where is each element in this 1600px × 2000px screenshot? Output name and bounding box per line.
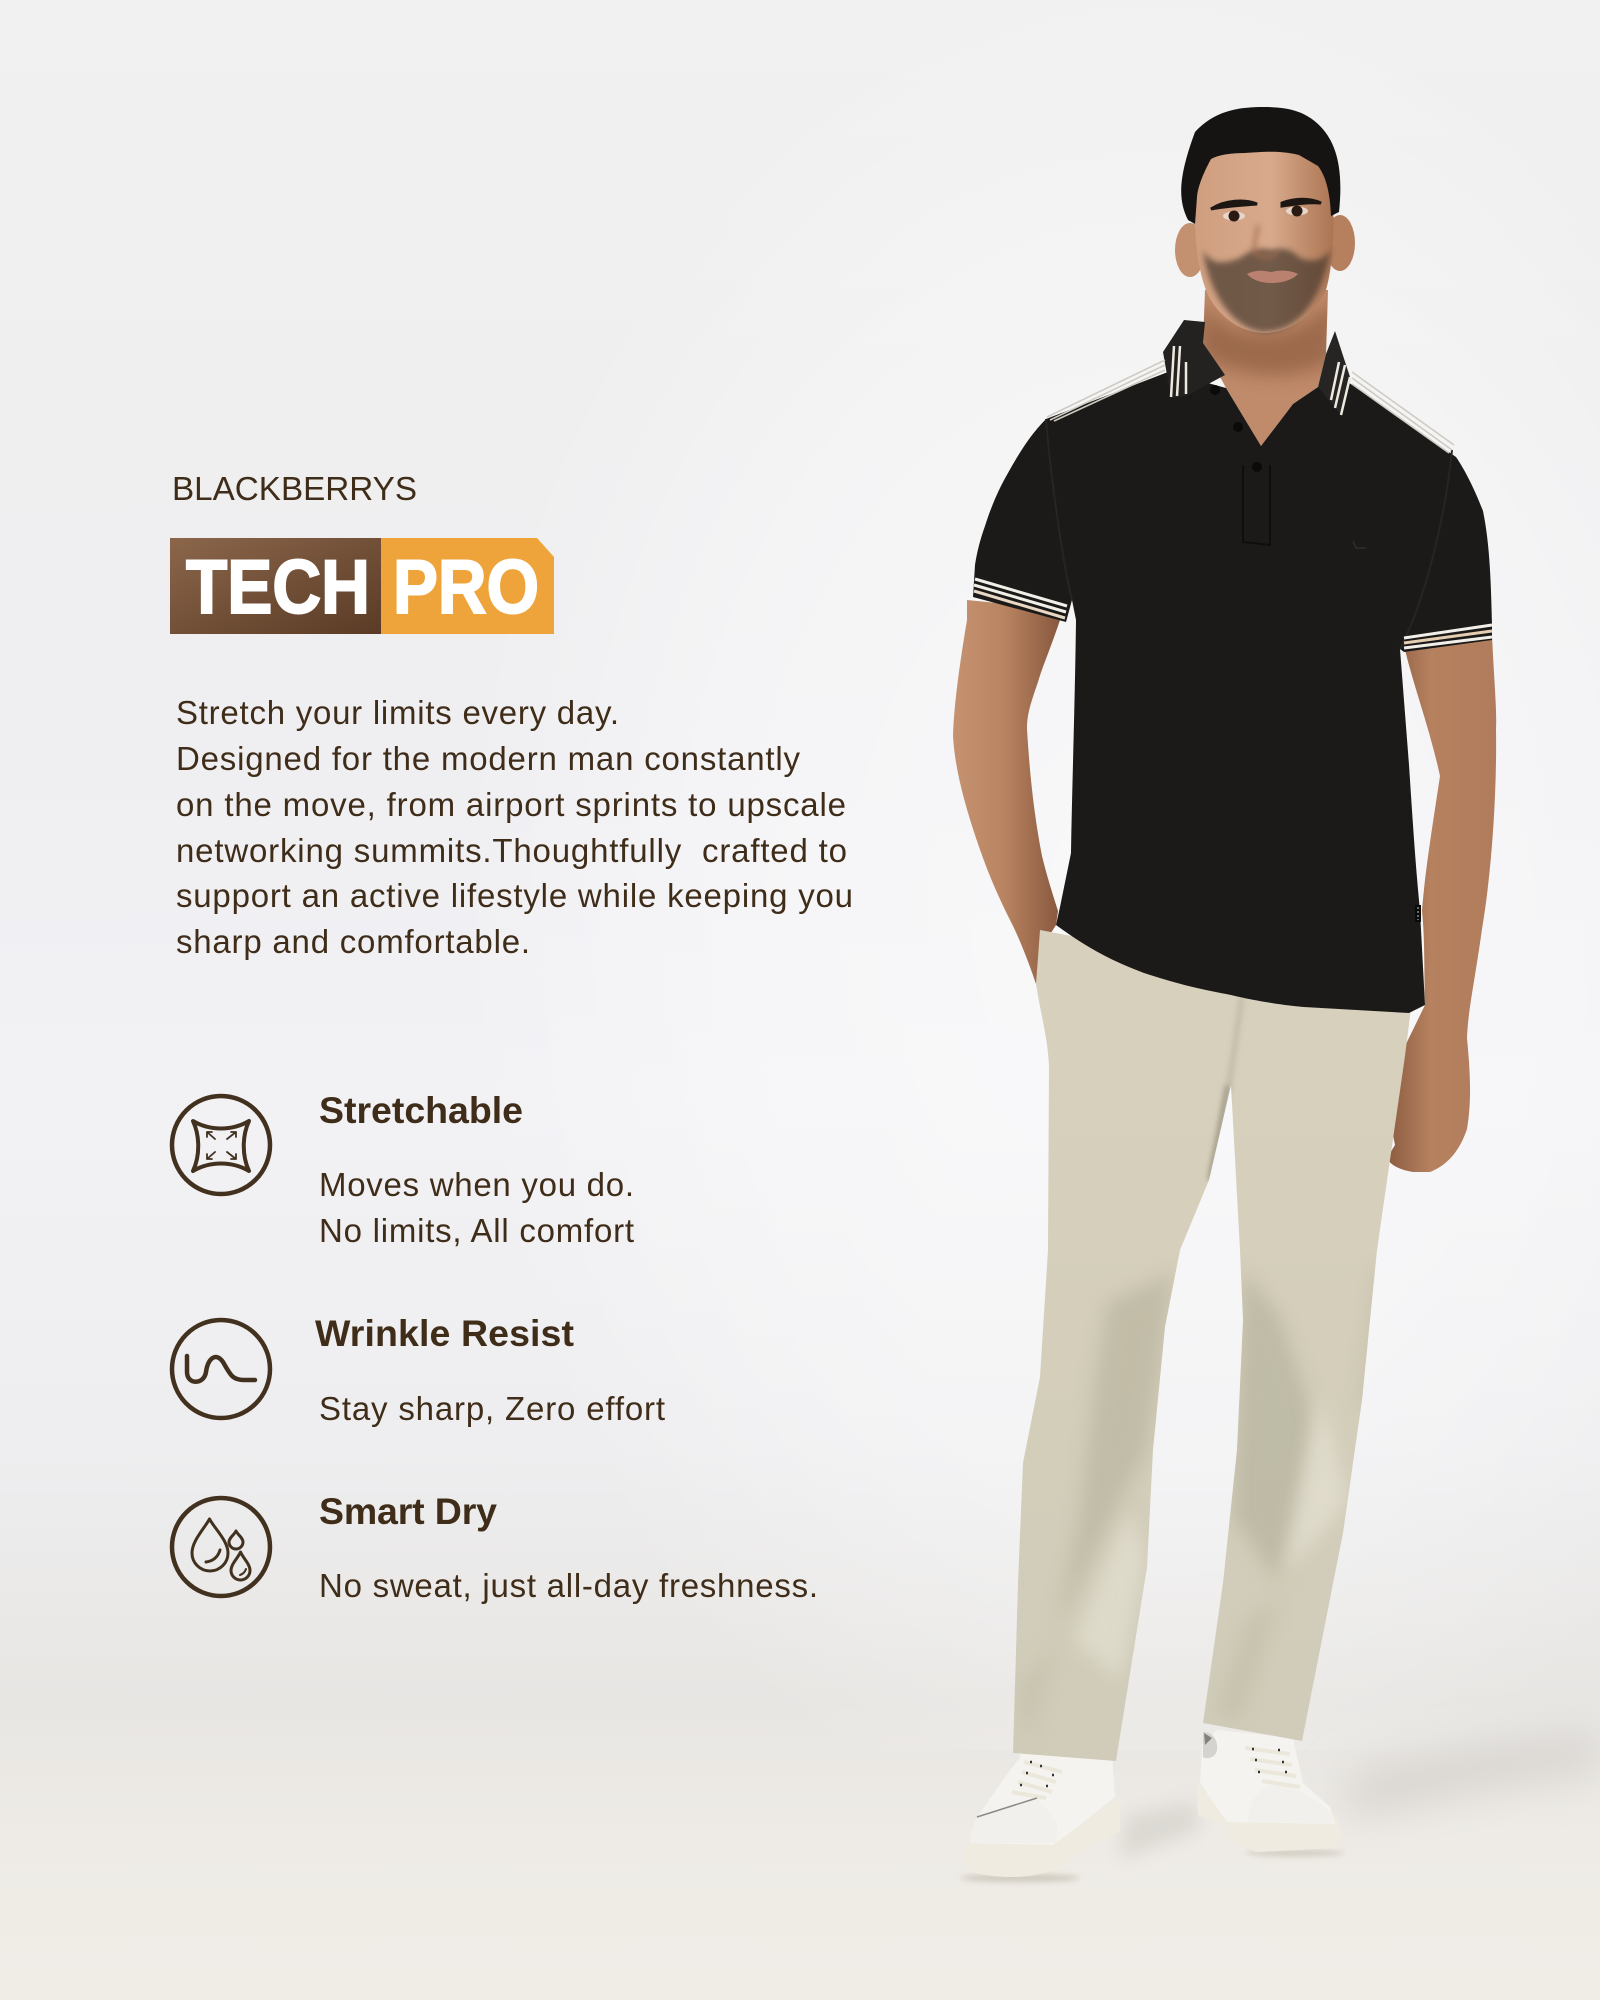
sleeve cuffs: [974, 579, 1492, 648]
heading: Stretchable: Stretchable: [319, 1089, 523, 1131]
background glow: [450, 0, 1600, 1750]
description paragraph: networking summits.Thoughtfully crafted to: [176, 832, 847, 869]
brand name: BLACKBERRYS: [172, 470, 417, 507]
icon: stretchable: [172, 1096, 270, 1194]
description paragraph: support an active lifestyle while keeping you: [176, 877, 853, 914]
shirt: [973, 372, 1492, 1013]
shoe: left: [963, 1750, 1120, 1877]
logo: Tech Pro: PRO: [393, 545, 539, 630]
description paragraph: [176, 694, 853, 960]
logo: Tech Pro: [170, 538, 554, 634]
stretchable description: No limits, All comfort: [319, 1212, 634, 1249]
floor shadow: [960, 1735, 1600, 1882]
description paragraph: Stretch your limits every day.: [176, 694, 619, 731]
model figure: [953, 107, 1496, 1877]
icon: smart dry: [172, 1498, 270, 1596]
trousers: [1013, 930, 1412, 1761]
shoulder stripes: [1047, 360, 1454, 453]
arm: left: [953, 600, 1066, 984]
icon: wrinkle resist: [172, 1320, 270, 1418]
description paragraph: sharp and comfortable.: [176, 923, 530, 960]
neck shadow: [1198, 295, 1335, 375]
shoe: right: [1197, 1730, 1342, 1852]
heading: Smart Dry: Smart Dry: [319, 1490, 497, 1532]
neck: [1203, 290, 1328, 446]
logo: Tech Pro: TECH: [186, 545, 370, 630]
heading: Wrinkle Resist: Wrinkle Resist: [315, 1312, 574, 1354]
stretchable description: Moves when you do.: [319, 1166, 634, 1203]
description paragraph: on the move, from airport sprints to upscale: [176, 786, 846, 823]
arm: right with hand: [1387, 635, 1496, 1172]
head: [1175, 107, 1355, 333]
smart dry description: No sweat, just all-day freshness.: [319, 1567, 818, 1604]
wrinkle resist description: Stay sharp, Zero effort: [319, 1390, 665, 1427]
description paragraph: Designed for the modern man constantly: [176, 740, 800, 777]
stretchable description: [319, 1166, 634, 1249]
collar: [1163, 320, 1350, 415]
